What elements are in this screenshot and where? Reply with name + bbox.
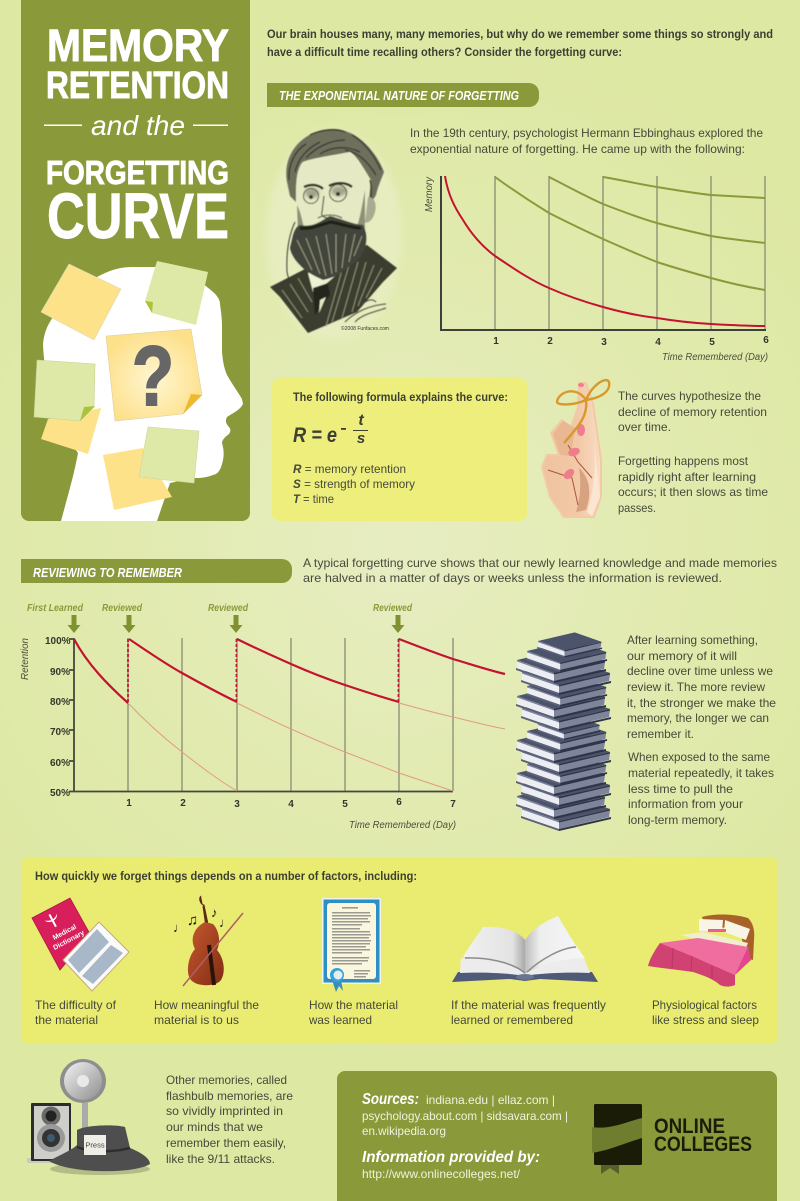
intro text — [267, 27, 773, 59]
review markers — [27, 603, 413, 633]
heading: reviewing to remember: REVIEWING TO REMEMBER — [33, 566, 182, 580]
chart: reviewing curves: Retention — [20, 638, 31, 680]
chart: reviewing curves: 6 — [396, 797, 402, 808]
sources text: psychology.about.com | sidsavara.com | — [362, 1109, 568, 1123]
chart: reviewing curves — [20, 603, 505, 831]
title: CURVE — [47, 180, 229, 252]
icon: cello — [173, 896, 243, 986]
chart: reviewing curves: 7 — [450, 799, 456, 810]
sources text: Information provided by: — [362, 1149, 540, 1166]
chart: forgetting curves: 5 — [709, 337, 715, 348]
formula legend: R = memory retention — [293, 462, 406, 476]
review markers: Reviewed — [373, 603, 413, 614]
icon: cello: ♩ — [173, 920, 186, 935]
logo: online colleges: ONLINE — [654, 1115, 725, 1138]
panel: formula — [272, 378, 527, 521]
text: flashbulb memories: remember them easily, — [166, 1136, 286, 1150]
chart: reviewing curves: Time Remembered (Day) — [349, 820, 456, 831]
chart: reviewing curves: 90% — [50, 667, 70, 678]
sticky notes — [34, 261, 208, 510]
chart: forgetting curves: Memory — [424, 176, 435, 212]
logo: online colleges — [592, 1104, 752, 1174]
chart: reviewing curves: 100% — [45, 636, 71, 647]
text: typical forgetting curve: A typical forgetting curve shows that our newly learned knowledge and made memories — [303, 556, 777, 570]
text: Ebbinghaus intro: In the 19th century, psychologist Hermann Ebbinghaus explored the — [410, 126, 763, 140]
text: curves hypothesize: over time. — [618, 420, 671, 434]
text: after learning: After learning something, — [627, 633, 758, 647]
text: after learning: less time to pull the — [628, 782, 733, 796]
heading: reviewing to remember — [21, 559, 292, 583]
icon: certificate — [322, 898, 381, 992]
chart: reviewing curves: 5 — [342, 799, 348, 810]
chart: forgetting curves: 6 — [763, 335, 769, 346]
title: MEMORY — [47, 20, 229, 71]
title: FORGETTING — [46, 154, 229, 191]
intro text: Our brain houses many, many memories, but why do we remember some things so strongly and — [267, 27, 773, 41]
text: typical forgetting curve: are halved in a matter of days or weeks unless the information is reviewed. — [303, 571, 722, 585]
chart: reviewing curves: 70% — [50, 727, 70, 738]
text: curves hypothesize — [618, 389, 768, 515]
review markers: Reviewed — [208, 603, 249, 614]
factor labels: like stress and sleep — [652, 1013, 759, 1027]
text: flashbulb memories: flashbulb memories, are — [166, 1089, 293, 1103]
icon: crossed fingers with string — [542, 380, 609, 517]
intro text: have a difficult time recalling others? Consider the forgetting curve: — [267, 45, 622, 59]
icon: cello: ♩ — [219, 915, 232, 930]
factor labels: The difficulty of — [35, 998, 117, 1012]
sources text: Sources: — [362, 1091, 419, 1108]
icon: open book — [452, 916, 598, 982]
formula — [293, 412, 368, 447]
text: curves hypothesize: occurs; it then slows as time — [618, 485, 768, 499]
text: after learning: material repeatedly, it takes — [628, 766, 774, 780]
text: Ebbinghaus intro — [410, 126, 763, 156]
heading: exponential nature: THE EXPONENTIAL NATURE OF FORGETTING — [279, 89, 519, 103]
sources text: en.wikipedia.org — [362, 1124, 446, 1138]
chart: forgetting curves: 4 — [655, 337, 661, 348]
text: after learning: memory, the longer we can — [627, 711, 769, 725]
heading: exponential nature — [267, 83, 539, 107]
icon: cello: ♪ — [211, 905, 218, 920]
chart: reviewing curves: 80% — [50, 697, 70, 708]
sources text: http://www.onlinecolleges.net/ — [362, 1167, 521, 1181]
review markers: Reviewed — [102, 603, 143, 614]
text: curves hypothesize: rapidly right after learning — [618, 470, 756, 484]
icon: medical dictionary: Dictionary — [52, 930, 86, 952]
title: RETENTION — [46, 65, 229, 107]
chart: reviewing curves: 60% — [50, 758, 70, 769]
text: typical forgetting curve — [303, 556, 777, 585]
panel: title and head — [21, 0, 250, 521]
text: after learning: When exposed to the same — [628, 750, 770, 764]
icon: bed — [648, 914, 754, 987]
icon: stack of books — [516, 632, 611, 831]
panel: sources — [337, 1071, 777, 1201]
text: after learning: remember it. — [627, 727, 694, 741]
text: flashbulb memories — [166, 1073, 293, 1166]
chart: reviewing curves: 3 — [234, 799, 240, 810]
title — [44, 20, 229, 252]
panel: formula: The following formula explains the curve: — [293, 390, 508, 404]
chart: reviewing curves: 2 — [180, 798, 186, 809]
logo: online colleges: COLLEGES — [654, 1133, 752, 1156]
sticky notes: ? — [132, 329, 174, 423]
formula: t — [358, 412, 364, 429]
text: after learning: decline over time unless we — [627, 664, 773, 678]
factor labels — [35, 998, 759, 1027]
formula: R = e — [293, 424, 337, 447]
icon: medical dictionary — [32, 898, 129, 991]
panel: factors — [21, 857, 778, 1044]
factor labels: How meaningful the — [154, 998, 259, 1012]
text: flashbulb memories: our minds that we — [166, 1120, 263, 1134]
portrait: Ebbinghaus sketch — [266, 129, 402, 340]
text: curves hypothesize: decline of memory retention — [618, 405, 767, 419]
formula legend — [293, 462, 415, 506]
text: after learning — [627, 633, 776, 827]
text: curves hypothesize: passes. — [618, 501, 656, 515]
chart: forgetting curves: 2 — [547, 336, 553, 347]
chart: forgetting curves — [424, 176, 769, 363]
text: after learning: review it. The more review — [627, 680, 765, 694]
formula legend: T = time — [293, 492, 334, 506]
text: flashbulb memories: like the 9/11 attacks. — [166, 1152, 275, 1166]
title: and the — [91, 110, 185, 141]
chart: forgetting curves: 1 — [493, 336, 499, 347]
text: after learning: it, the stronger we make the — [627, 696, 776, 710]
portrait: Ebbinghaus sketch: ©2008 Funfaces.com — [341, 325, 389, 332]
chart: reviewing curves: 4 — [288, 799, 294, 810]
chart: forgetting curves: Time Remembered (Day) — [662, 352, 768, 363]
icon: medical dictionary: Medical — [52, 924, 78, 942]
text: curves hypothesize: The curves hypothesize the — [618, 389, 761, 403]
text: curves hypothesize: Forgetting happens most — [618, 454, 749, 468]
chart: reviewing curves: 50% — [50, 788, 70, 799]
review markers: First Learned — [27, 603, 84, 614]
factor labels: How the material — [309, 998, 398, 1012]
text: after learning: long-term memory. — [628, 813, 727, 827]
panel: factors: How quickly we forget things depends on a number of factors, including: — [35, 869, 417, 883]
factor labels: material is to us — [154, 1013, 239, 1027]
factor labels: Physiological factors — [652, 998, 757, 1012]
text: Ebbinghaus intro: exponential nature of forgetting. He came up with the following: — [410, 142, 745, 156]
factor labels: the material — [35, 1013, 98, 1027]
icon: cello: ♫ — [187, 912, 198, 929]
formula legend: S = strength of memory — [293, 477, 415, 491]
text: flashbulb memories: so vividly imprinted in — [166, 1104, 283, 1118]
text: after learning: our memory of it will — [627, 649, 737, 663]
formula: s — [357, 430, 365, 447]
icon: press camera and hat: Press — [85, 1140, 105, 1150]
factor labels: If the material was frequently — [451, 998, 606, 1012]
text: after learning: information from your — [628, 797, 743, 811]
chart: reviewing curves: 1 — [126, 798, 132, 809]
chart: forgetting curves: 3 — [601, 337, 607, 348]
sources text: indiana.edu | ellaz.com | — [426, 1093, 555, 1107]
sources text — [362, 1091, 568, 1181]
factor labels: was learned — [308, 1013, 372, 1027]
factor labels: learned or remembered — [451, 1013, 573, 1027]
head silhouette — [43, 267, 243, 521]
text: flashbulb memories: Other memories, called — [166, 1073, 287, 1087]
icon: press camera and hat — [27, 1059, 150, 1175]
